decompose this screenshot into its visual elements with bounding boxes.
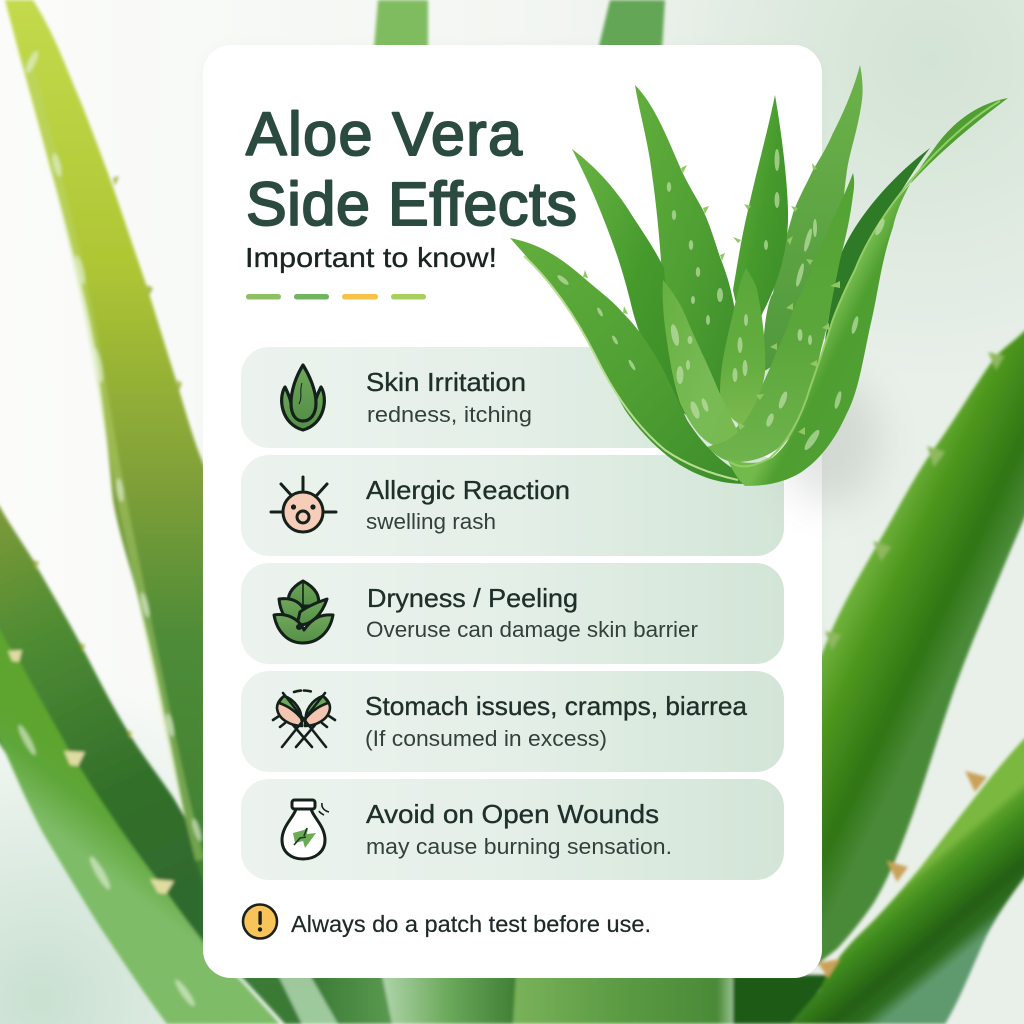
title: Aloe Vera bbox=[246, 100, 522, 168]
centre back leaf bbox=[733, 95, 788, 345]
row: dryness / peeling: Overuse can damage skin barrier bbox=[366, 617, 698, 642]
subtitle: Important to know! bbox=[245, 242, 497, 273]
dark back of right leaf bbox=[825, 148, 930, 340]
tall left leaf bbox=[635, 85, 736, 395]
second left leaf bbox=[572, 149, 692, 420]
icon: face with rays bbox=[271, 477, 336, 532]
icon: peeling leaves bbox=[274, 581, 333, 643]
row: allergic reaction: Allergic Reaction bbox=[366, 475, 570, 505]
row: open wounds: Avoid on Open Wounds bbox=[366, 799, 659, 829]
small centre leaf bbox=[720, 268, 765, 425]
row: dryness / peeling bbox=[241, 563, 784, 664]
title: Side Effects bbox=[246, 170, 577, 238]
bottom left leaf bbox=[510, 238, 747, 484]
front left leaf bbox=[663, 280, 738, 445]
footer note: Always do a patch test before use. bbox=[291, 911, 651, 937]
row: skin irritation: Skin Irritation bbox=[366, 367, 526, 397]
plant shadow bbox=[780, 375, 880, 505]
icon: bottle with leaf bbox=[282, 800, 329, 859]
right leaf light edge bbox=[730, 101, 1000, 466]
right big leaf bbox=[727, 98, 1008, 486]
title bbox=[246, 100, 577, 238]
icon: warning bbox=[243, 904, 277, 938]
icon: aloe sprout bbox=[282, 365, 324, 430]
front right leaf bbox=[707, 173, 854, 462]
row: stomach issues: (If consumed in excess) bbox=[365, 726, 607, 751]
aloe white spots bbox=[556, 149, 887, 452]
tall back right leaf bbox=[763, 65, 863, 372]
aloe plant bbox=[510, 65, 1008, 505]
icon: crossed aloe leaves bbox=[273, 690, 335, 747]
colour dashes bbox=[246, 294, 426, 300]
card shadow bbox=[205, 48, 820, 976]
row: open wounds bbox=[241, 779, 784, 880]
row: open wounds: may cause burning sensation. bbox=[366, 834, 672, 859]
row: stomach issues: Stomach issues, cramps, biarrea bbox=[365, 691, 748, 721]
row: allergic reaction bbox=[241, 455, 784, 556]
aloe leaf spines bbox=[583, 163, 840, 435]
bottom leaf highlight bbox=[524, 256, 738, 480]
row: dryness / peeling: Dryness / Peeling bbox=[367, 583, 578, 613]
row: skin irritation bbox=[241, 347, 784, 448]
row: allergic reaction: swelling rash bbox=[366, 509, 496, 534]
row: skin irritation: redness, itching bbox=[367, 402, 532, 427]
white card bbox=[203, 45, 822, 978]
row: stomach issues bbox=[241, 671, 784, 772]
